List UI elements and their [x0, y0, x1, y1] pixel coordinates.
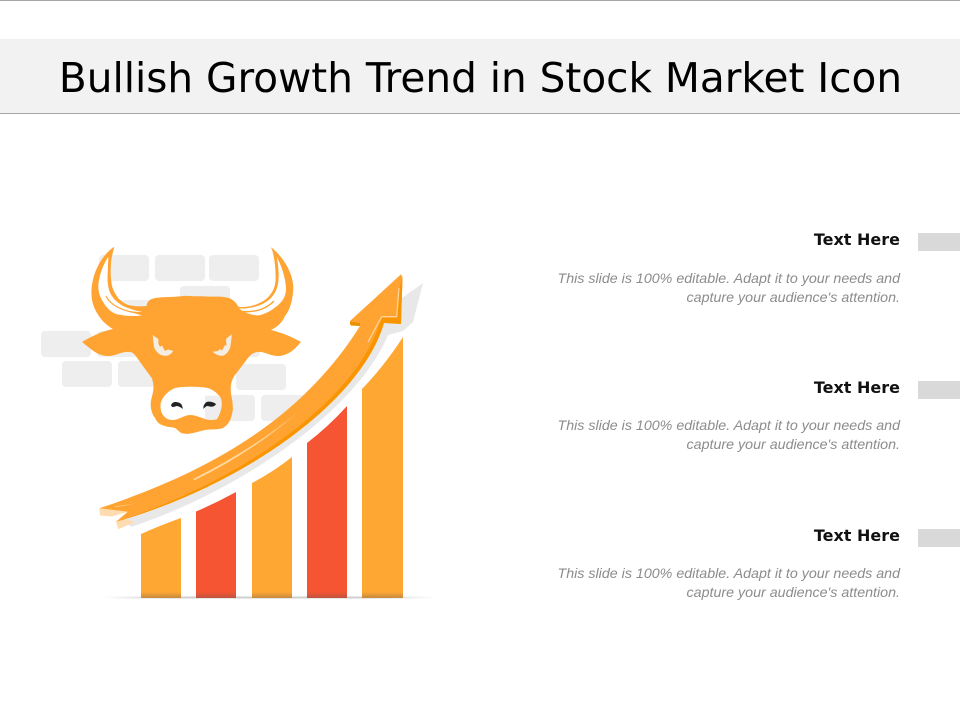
description 2: capture your audience's attention. [687, 437, 900, 453]
bar 5 [362, 337, 403, 598]
title: Bullish Growth Trend in Stock Market Icon [59, 54, 902, 102]
left eye [153, 335, 173, 356]
arrow lower edge [116, 277, 402, 522]
description 2 [558, 418, 900, 453]
left horn streak [106, 296, 141, 314]
right nostril [203, 402, 216, 409]
description 1 [558, 271, 900, 306]
arrow barb [350, 322, 360, 326]
marker 3 [918, 529, 960, 547]
brick wall [41, 255, 311, 421]
description 3: capture your audience's attention. [687, 585, 900, 601]
description 1: This slide is 100% editable. Adapt it to your needs and [558, 271, 900, 287]
text block 2 [558, 378, 900, 453]
right eye [213, 334, 232, 356]
description 1: capture your audience's attention. [687, 290, 900, 306]
arrow highlight [193, 413, 297, 480]
head silhouette [82, 247, 301, 434]
bar chart [103, 337, 436, 598]
bar 4 [307, 406, 347, 598]
bar 3 [252, 457, 292, 598]
growth arrow [99, 274, 423, 529]
left horn crescent [98, 257, 142, 316]
heading 2: Text Here [814, 378, 900, 397]
bull head [82, 247, 301, 434]
baseline shadow [103, 596, 436, 598]
left nostril [171, 402, 183, 409]
arrow body [99, 274, 403, 522]
heading 1: Text Here [814, 230, 900, 249]
bar base shading [141, 592, 403, 598]
heading 3: Text Here [814, 526, 900, 545]
arrow shadow [118, 283, 423, 527]
marker 1 [918, 233, 960, 251]
tail pieces [99, 508, 128, 516]
description 3 [558, 566, 900, 601]
text block 1 [558, 230, 900, 306]
right horn crescent [239, 257, 286, 316]
title band [0, 39, 960, 114]
nostril shade [205, 396, 222, 420]
description 2: This slide is 100% editable. Adapt it to your needs and [558, 418, 900, 434]
snout [160, 387, 222, 420]
text block 3 [558, 526, 900, 601]
description 3: This slide is 100% editable. Adapt it to your needs and [558, 566, 900, 582]
right horn streak [243, 301, 274, 312]
marker 2 [918, 381, 960, 399]
bar 2 [196, 492, 236, 598]
bar 1 [141, 518, 181, 598]
